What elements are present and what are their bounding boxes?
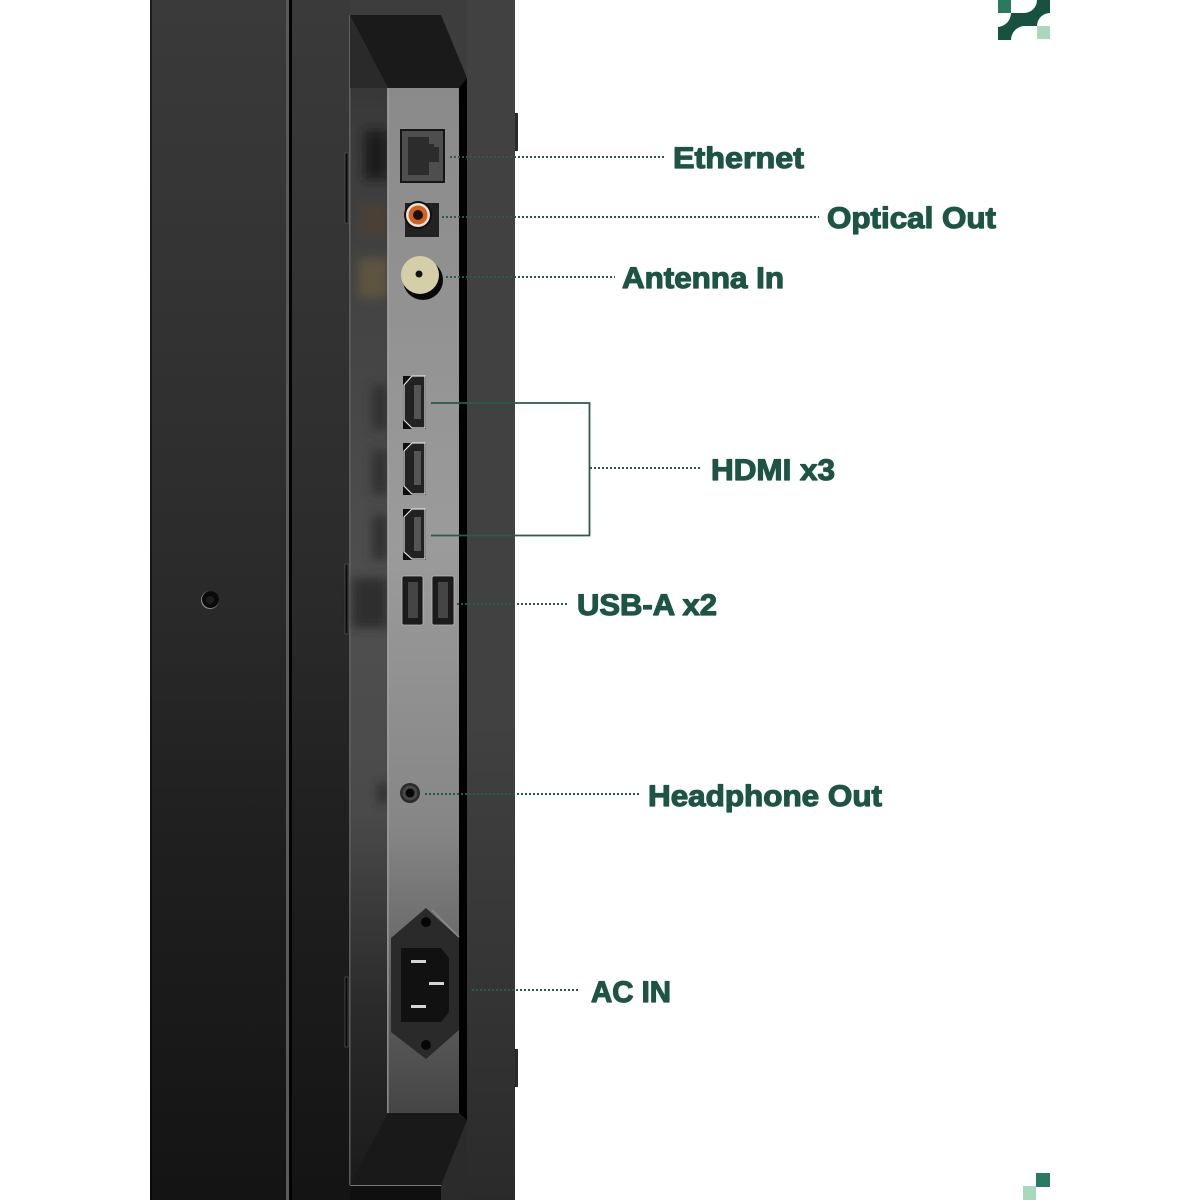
label: Antenna In: Antenna In (622, 262, 784, 295)
logo mark: bottom right (1023, 1173, 1050, 1200)
label: HDMI x3: HDMI x3 (711, 454, 835, 487)
TV rear panel photo (150, 0, 518, 1200)
side clips (345, 153, 348, 223)
label: Optical Out: Optical Out (827, 202, 996, 235)
black side strip (459, 78, 467, 1125)
bottom recess wall (350, 1113, 467, 1185)
middle housing panel (292, 0, 350, 1200)
right housing rail (467, 0, 515, 1200)
leader: ethernet (450, 156, 665, 158)
icon: HDMI port 3 (403, 509, 426, 560)
icon: HDMI port 1 (403, 376, 426, 429)
icon: USB-A port 1 (402, 576, 423, 625)
icon: headphone jack (400, 783, 420, 803)
icon: AC power inlet (391, 908, 459, 1059)
logo mark: top right (998, 0, 1050, 40)
blurred reflections (352, 130, 388, 803)
leader: AC in (472, 989, 580, 991)
screw hole (201, 591, 219, 609)
left housing panel (150, 0, 287, 1200)
label: USB-A x2: USB-A x2 (577, 589, 717, 622)
leader: antenna in (446, 276, 615, 278)
icon: optical out port (404, 201, 439, 237)
leader: USB-A (457, 603, 567, 605)
recess interior (350, 15, 467, 1185)
icon: ethernet port (400, 129, 445, 183)
icon: HDMI port 2 (403, 443, 426, 495)
label: Ethernet: Ethernet (673, 142, 804, 175)
label: AC IN: AC IN (591, 976, 671, 1009)
icon: USB-A port 2 (432, 576, 454, 625)
label: Headphone Out: Headphone Out (648, 780, 882, 813)
icon: antenna in port (401, 256, 443, 300)
leader: optical out (442, 216, 819, 218)
top recess wall (350, 15, 467, 88)
bracket: HDMI (431, 403, 700, 536)
connector plate (388, 88, 459, 1113)
leader: headphone out (425, 793, 640, 795)
